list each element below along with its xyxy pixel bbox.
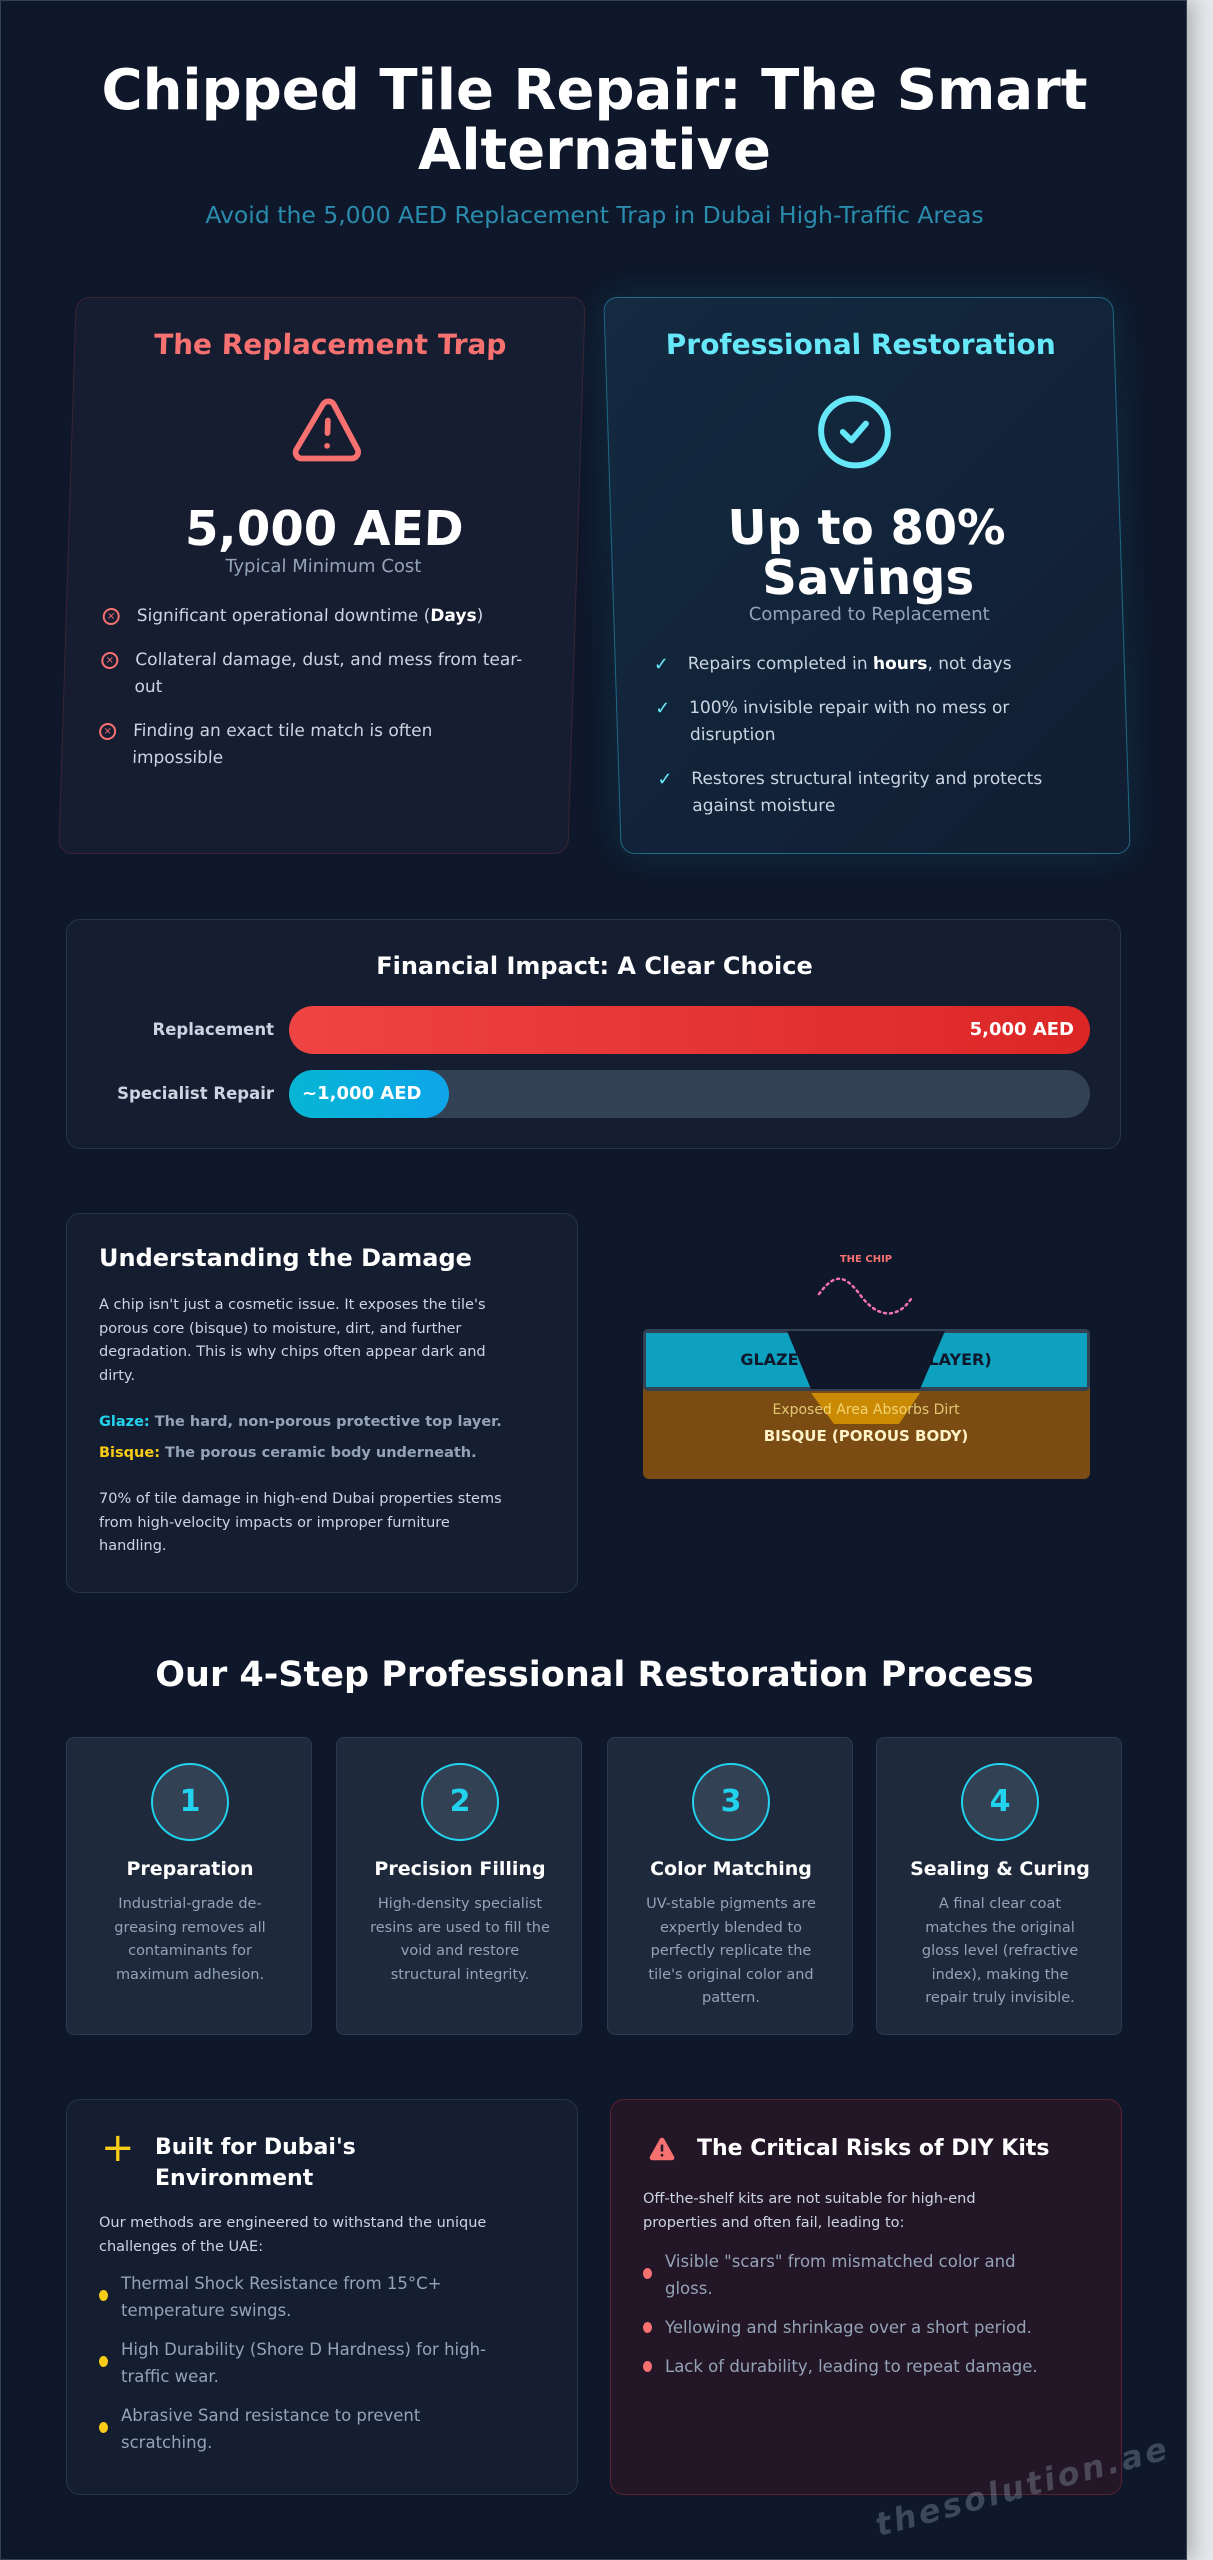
list: benefits: ✓ (655, 698, 671, 719)
list: High Durability (Shore D Hardness) for high-traffic wear. (121, 2340, 486, 2386)
caption: Typical Minimum Cost (225, 556, 422, 577)
heading: replacement trap: The Replacement Trap (154, 328, 507, 361)
list: benefits: 100% invisible repair with no mess or disruption (689, 698, 1010, 745)
step 1: 1 (180, 1784, 200, 1819)
label: the chip: THE CHIP (840, 1254, 892, 1265)
list: Yellowing and shrinkage over a short period. (665, 2318, 1032, 2337)
list: Thermal Shock Resistance from 15°C+ temperature swings. (121, 2274, 442, 2320)
step 3: UV-stable pigments are expertly blended to perfectly replicate the tile's original color and pattern. (646, 1896, 816, 2006)
list: Abrasive Sand resistance to prevent scratching. (121, 2406, 420, 2452)
heading: Built for Dubai's (155, 2135, 356, 2160)
text block: Our methods are engineered to withstand the unique challenges of the UAE: (99, 2215, 486, 2254)
caption: Compared to Replacement (748, 604, 990, 625)
step 3: Color Matching (650, 1858, 812, 1880)
text block: Off-the-shelf kits are not suitable for high-end properties and often fail, leading to: (643, 2191, 976, 2230)
icon: check circle (818, 396, 891, 468)
step 2: 2 (450, 1784, 470, 1819)
list: benefits: Restores structural integrity and protects against moisture (691, 769, 1043, 816)
bar: replacement (152, 1006, 1090, 1054)
title: Chipped Tile Repair: The Smart (101, 58, 1088, 123)
panel: replacement trap (58, 297, 586, 854)
bar chart (117, 1006, 1090, 1118)
list: Lack of durability, leading to repeat damage. (665, 2357, 1038, 2376)
text block (99, 1297, 502, 1554)
icon: plus: + (101, 2125, 135, 2171)
list (643, 2252, 1038, 2376)
heading: Environment (155, 2166, 313, 2191)
stat: 80% savings: Savings (761, 550, 975, 606)
step 1: Preparation (126, 1858, 253, 1880)
panel: understanding the damage (66, 1213, 578, 1593)
list: downsides: × (103, 726, 112, 737)
bar: specialist repair (117, 1070, 1090, 1118)
heading: 4-step process: Our 4-Step Professional Restoration Process (155, 1655, 1034, 1695)
list: downsides: Finding an exact tile match is often impossible (132, 721, 433, 768)
step 3 (607, 1737, 853, 2035)
list: downsides (99, 606, 523, 768)
step 4: A final clear coat matches the original gloss level (refractive index), making the repair truly invisible. (922, 1896, 1078, 2006)
chart: tile cross-section diagram: BISQUE (POROUS BODY) (764, 1427, 968, 1445)
panel: financial impact (66, 919, 1121, 1149)
stat: 80% savings (727, 500, 1006, 606)
panel: steps (66, 1737, 1122, 2035)
step 2 (336, 1737, 582, 2035)
step 4: 4 (990, 1784, 1010, 1819)
step 1 (66, 1737, 312, 2035)
bar: replacement: Replacement (152, 1020, 274, 1039)
step 4: Sealing & Curing (910, 1858, 1090, 1880)
title (101, 58, 1088, 183)
list: Visible "scars" from mismatched color and gloss. (665, 2252, 1016, 2298)
watermark: thesolution.ae (871, 2429, 1174, 2544)
list: downsides: Significant operational downtime (Days) (136, 606, 484, 626)
list: benefits: Repairs completed in hours, not days (687, 654, 1012, 674)
text block: 70% of tile damage in high-end Dubai properties stems from high-velocity impacts or improper furniture handling. (99, 1491, 502, 1554)
bar: replacement: 5,000 AED (970, 1019, 1074, 1040)
heading: The Critical Risks of DIY Kits (697, 2136, 1049, 2161)
heading: professional restoration: Professional Restoration (665, 328, 1056, 361)
list: benefits: ✓ (653, 654, 669, 675)
text block: A chip isn't just a cosmetic issue. It exposes the tile's porous core (bisque) to moisture, dirt, and further degradation. This is why chips often appear dark and dirty. (99, 1297, 486, 1384)
list: downsides: × (107, 611, 116, 622)
chart: tile cross-section diagram: GLAZE (PROTECTIVE LAYER) (740, 1350, 992, 1369)
title: Alternative (418, 118, 771, 183)
list: benefits (653, 654, 1043, 816)
heading: financial impact: Financial Impact: A Clear Choice (376, 952, 813, 980)
subtitle: Avoid the 5,000 AED Replacement Trap in Dubai High-Traffic Areas (205, 201, 984, 229)
bar: specialist repair: Specialist Repair (117, 1084, 274, 1103)
panel: built for Dubai (66, 2099, 578, 2495)
list: downsides: × (105, 655, 114, 666)
heading (155, 2135, 356, 2191)
chart: tile cross-section diagram: Exposed Area Absorbs Dirt (772, 1402, 960, 1418)
icon: warning (650, 2138, 674, 2160)
list (99, 2274, 486, 2452)
icon: warning triangle (292, 398, 361, 462)
stat: 80% savings: Up to 80% (727, 500, 1006, 556)
list: downsides: Collateral damage, dust, and mess from tear-out (134, 650, 523, 697)
list: benefits: ✓ (657, 769, 673, 790)
step 1: Industrial-grade de-greasing removes all contaminants for maximum adhesion. (114, 1896, 266, 1982)
heading: Understanding the Damage (99, 1244, 472, 1272)
step 4 (876, 1737, 1122, 2035)
chart: tile cross-section diagram (643, 1254, 1090, 1479)
step 2: Precision Filling (374, 1858, 546, 1880)
bar: specialist repair: ~1,000 AED (302, 1083, 421, 1104)
panel: professional restoration (603, 297, 1131, 854)
text block: Glaze: The hard, non-porous protective top layer. (99, 1414, 502, 1430)
step 2: High-density specialist resins are used to fill the void and restore structural integrity. (370, 1896, 550, 1982)
stat: 5000 AED: 5,000 AED (184, 501, 464, 557)
step 3: 3 (721, 1784, 741, 1819)
panel: DIY risks (610, 2099, 1122, 2495)
text block: Bisque: The porous ceramic body underneath. (99, 1444, 477, 1460)
